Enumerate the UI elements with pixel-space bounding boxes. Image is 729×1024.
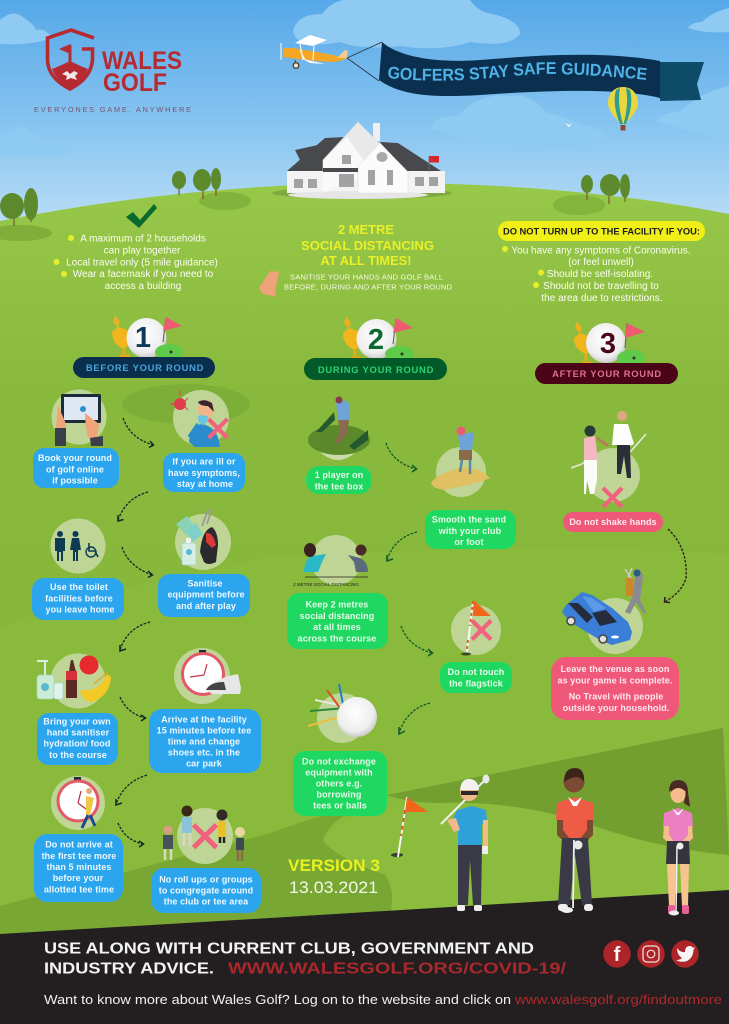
heading: 2 METRE (338, 222, 394, 237)
golfer: blue shirt (441, 774, 490, 911)
arrow (387, 532, 417, 561)
tagline: EVERYONES GAME. ANYWHERE (34, 105, 191, 114)
text box: with your club (438, 526, 502, 536)
arrow (120, 622, 150, 651)
icon: toilet symbols (50, 518, 106, 574)
warning list: do not turn up (498, 221, 705, 304)
version note (288, 857, 380, 897)
text box: you leave home (46, 604, 114, 614)
text box: the club or tee area (164, 896, 249, 906)
section header: after your round (535, 321, 678, 384)
icon: red cross (195, 827, 215, 846)
text box: No Travel with people (569, 692, 663, 702)
text box: tees or balls (313, 800, 367, 810)
label pill: AFTER YOUR ROUND (552, 368, 662, 379)
text box: Do not arrive at (45, 840, 113, 850)
arrow (123, 418, 154, 448)
text box: 15 minutes before tee (157, 726, 251, 736)
trees (0, 168, 630, 241)
text box: the first tee more (42, 851, 116, 861)
text box: the tee box (315, 482, 363, 492)
step: do not arrive too early (34, 776, 123, 902)
bullet list: can play together (104, 246, 181, 256)
text box: the flagstick (449, 678, 504, 688)
arrow (116, 775, 147, 805)
footer website text (44, 993, 722, 1007)
bullet list (54, 234, 218, 292)
step: do not touch flagstick (440, 600, 512, 693)
text box: Arrive at the facility (161, 714, 247, 724)
icon: trophy, ball and flag (112, 315, 183, 360)
icon: hot air balloon (608, 87, 638, 130)
section header: before your round (73, 315, 215, 378)
text box: allotted tee time (44, 884, 114, 894)
heading: AT ALL TIMES! (320, 253, 412, 268)
heading (301, 222, 434, 268)
sky background (0, 0, 729, 240)
check list: before you play (54, 204, 218, 292)
logo: Wales Golf (34, 30, 191, 114)
step: leave the venue (551, 568, 679, 720)
step: sanitise equipment (158, 508, 250, 617)
text box: Do not shake hands (569, 517, 657, 527)
icon: stopwatch and shoes (174, 648, 241, 704)
wordmark: WALES (102, 47, 182, 75)
bullets: Should be self-isolating. (547, 269, 653, 280)
text box: outside your household. (563, 703, 669, 713)
text box: Book your round (38, 453, 112, 463)
text box: Use the toilet (50, 582, 108, 592)
text box: 1 player on (315, 470, 363, 480)
text box: hydration/ food (44, 738, 110, 748)
sanitise note (284, 272, 453, 292)
text box: Bring your own (43, 716, 111, 726)
arrow (118, 492, 148, 521)
step: smooth the sand (425, 426, 516, 549)
text box (33, 448, 119, 488)
bullets: (or feel unwell) (568, 257, 634, 268)
text box: hand sanitiser (47, 728, 110, 738)
clouds (0, 0, 729, 157)
arrow (664, 529, 686, 602)
text box: stay at home (177, 479, 233, 489)
icon: flag with cross (451, 600, 501, 656)
icon: instagram (637, 940, 665, 968)
icon: trophy, ball and flag: 2 (368, 324, 384, 356)
bullet list: access a building (105, 281, 181, 292)
arrow (401, 626, 432, 656)
text box: to the course (49, 750, 107, 760)
text box (440, 662, 512, 693)
footer advice text: INDUSTRY ADVICE. (44, 960, 214, 978)
step: arrive early (149, 648, 261, 773)
icon: golf flag in hole (391, 797, 428, 857)
icon: shield (48, 30, 94, 89)
footer website text: www.walesgolf.org/findoutmore (514, 993, 722, 1007)
icon: golfer in bunker (431, 426, 490, 497)
text box: social distancing (300, 611, 374, 621)
footer advice text: USE ALONG WITH CURRENT CLUB, GOVERNMENT AND (44, 940, 534, 958)
text box (149, 709, 261, 773)
bullet list: Wear a facemask if you need to (73, 269, 214, 280)
icon: red cross (210, 420, 226, 436)
text box: before your (53, 873, 104, 883)
icon: two people distancing: 2 METRE SOCIAL DISTANCING (293, 582, 359, 587)
icon: green tick (126, 204, 157, 228)
text box: Sanitise (187, 578, 223, 588)
text box: equipment with (305, 768, 373, 778)
text box: facilities before (45, 594, 113, 604)
icon: trophy, ball and flag: 3 (600, 328, 616, 360)
text box (32, 578, 124, 620)
icon: golf ball and tees (308, 684, 377, 743)
step: bring your own (37, 654, 118, 765)
banner: guidance title (379, 42, 704, 101)
text box: Do not exchange (302, 756, 376, 766)
text box (425, 510, 516, 549)
icon: twitter (671, 940, 699, 968)
sanitise note: BEFORE, DURING AND AFTER YOUR ROUND (284, 282, 453, 292)
icon: clubhouse (272, 122, 452, 199)
text box: if possible (52, 476, 98, 486)
text box: of golf online (46, 464, 104, 474)
step: do not shake hands (563, 411, 663, 532)
text box: or foot (454, 537, 484, 547)
icon: trophy, ball and flag (343, 316, 414, 362)
text box: borrowing (317, 790, 361, 800)
icon: small bird (565, 123, 572, 127)
version note: VERSION 3 (288, 857, 380, 875)
text box (306, 466, 372, 494)
text box: Do not touch (448, 667, 504, 677)
text box: to congregate around (159, 886, 253, 896)
text box (34, 834, 123, 902)
heading: SOCIAL DISTANCING (301, 238, 434, 253)
label pill (73, 357, 215, 378)
icon: biplane towing banner (281, 35, 382, 81)
bullets: the area due to restrictions. (541, 293, 663, 304)
icon: tablet (52, 390, 106, 446)
text box (163, 453, 245, 492)
arrow (118, 823, 144, 847)
text box: across the course (298, 634, 376, 644)
bullets (502, 246, 691, 304)
icon: trophy, ball and flag (574, 321, 645, 366)
step: keep 2 metres (287, 535, 388, 649)
text box: have symptoms, (168, 468, 240, 478)
text box: others e.g. (316, 778, 362, 788)
text box: as your game is complete. (557, 676, 673, 686)
text box (293, 751, 387, 816)
text box: Leave the venue as soon (561, 664, 669, 674)
icon: sanitising hands (259, 271, 279, 297)
bullets: Should not be travelling to (543, 281, 659, 292)
text box (551, 657, 679, 720)
dark footer band (0, 890, 729, 1024)
text box: Keep 2 metres (306, 600, 368, 610)
arrow (399, 703, 430, 734)
text box: at all times (313, 622, 361, 632)
icon: sanitiser, drink and fruit (37, 654, 111, 708)
text box: and after play (176, 601, 236, 611)
step: no roll ups (151, 806, 261, 913)
golfer: pink shirt (663, 780, 693, 916)
arrow (122, 547, 152, 578)
icon: stopwatch and runner (51, 776, 105, 830)
icon: trophy, ball and flag: 1 (135, 322, 151, 354)
icon: sanitiser and golf bag (175, 508, 231, 570)
bullet list: Local travel only (5 mile guidance) (66, 258, 218, 268)
text box: than 5 minutes (47, 862, 111, 872)
text box (158, 574, 250, 617)
label pill (304, 358, 447, 380)
text box: No roll ups or groups (159, 874, 253, 884)
text box: equipment before (167, 590, 245, 600)
banner: guidance title: GOLFERS STAY SAFE GUIDANCE (388, 62, 647, 81)
label pill (535, 363, 678, 384)
step: book online (33, 390, 119, 488)
text box: If you are ill or (172, 456, 236, 466)
icon: group of people (163, 806, 245, 864)
label pill: DURING YOUR ROUND (318, 364, 434, 375)
step: one player on tee box (306, 396, 372, 494)
arrow (386, 443, 416, 472)
bullet list: A maximum of 2 households (80, 234, 206, 244)
arrow (120, 697, 146, 721)
icon: two people shaking hands (571, 411, 646, 506)
sanitise note: SANITISE YOUR HANDS AND GOLF BALL (290, 272, 443, 282)
text box: Smooth the sand (432, 514, 506, 524)
text box: time and change (168, 736, 240, 746)
section header: during your round (304, 316, 447, 380)
footer advice text: WWW.WALESGOLF.ORG/COVID-19/ (228, 960, 567, 978)
wordmark (102, 47, 182, 97)
golfer: red shirt (556, 768, 594, 913)
step: use the toilet (32, 518, 124, 620)
footer advice text (44, 940, 567, 978)
yellow heading pill (498, 221, 705, 241)
text box (151, 868, 261, 913)
label pill: BEFORE YOUR ROUND (86, 362, 204, 373)
text box: shoes etc. in the (168, 748, 240, 758)
social distancing message (259, 222, 453, 297)
footer website text: Want to know more about Wales Golf? Log on to the website and click on (44, 993, 511, 1007)
text box (37, 713, 118, 765)
step: do not exchange equipment (293, 684, 387, 816)
text box: car park (186, 758, 223, 768)
icon: golfer on tee box (308, 396, 370, 460)
wordmark: GOLF (103, 69, 167, 97)
icon: masked person and virus (170, 390, 229, 447)
hill shading (0, 384, 729, 938)
social icons (603, 940, 699, 968)
text box (287, 593, 388, 649)
icon: facebook: f (614, 944, 621, 966)
icon: car and golfer (562, 568, 646, 654)
version note: 13.03.2021 (289, 878, 378, 897)
bullets: You have any symptoms of Coronavirus. (511, 246, 691, 256)
yellow heading pill: DO NOT TURN UP TO THE FACILITY IF YOU: (503, 226, 700, 238)
step: stay home if ill (163, 390, 245, 492)
